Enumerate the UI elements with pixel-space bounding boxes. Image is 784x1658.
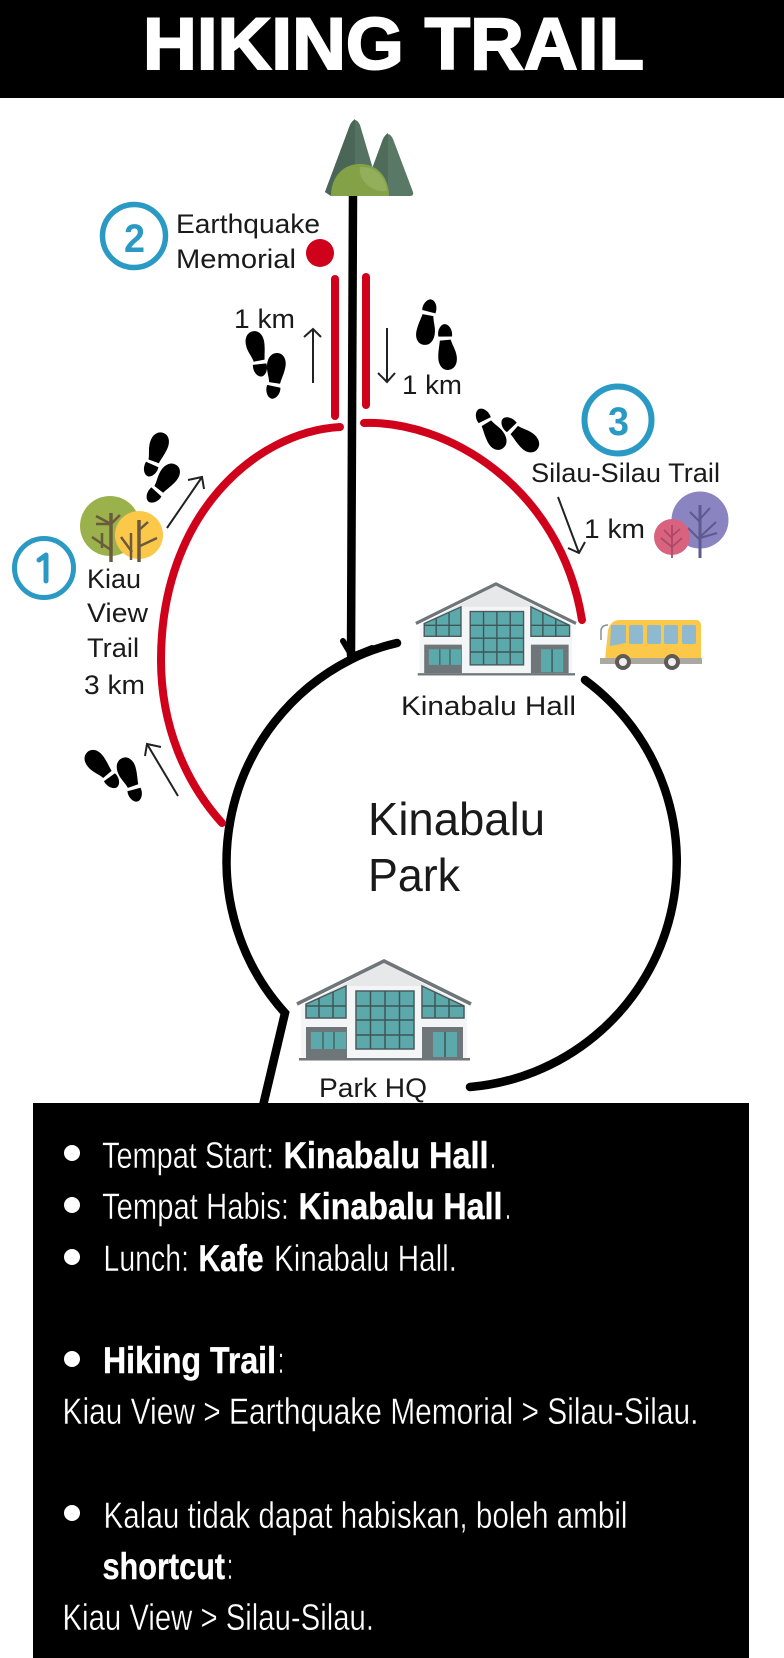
bullet: hiking trail route: Hiking Trail — [103, 1340, 276, 1381]
label: 1 km Silau-Silau: 1 km — [584, 514, 645, 544]
bullet list: start, finish, lunch: Kinabalu Hall — [284, 1135, 488, 1176]
bullet: shortcut route — [62, 1495, 628, 1638]
icon: mountain summit — [325, 119, 413, 196]
label: 1 km down: 1 km — [402, 370, 462, 400]
label: Kiau View Trail 3 km: 3 km — [84, 670, 145, 700]
red trail: Kiau View — [161, 427, 340, 823]
badge 2 — [102, 204, 166, 268]
arrow: Kiau View upper — [167, 477, 204, 528]
label: Park HQ: Park HQ — [319, 1073, 427, 1103]
bullet list: start, finish, lunch: Kinabalu Hall. — [274, 1238, 457, 1279]
title: HIKING TRAIL — [143, 4, 644, 85]
icon: green and yellow trees — [80, 496, 163, 562]
bullet list: start, finish, lunch: Tempat Habis: — [102, 1186, 289, 1227]
arrow: down — [378, 328, 395, 382]
footprints: left of spur — [244, 330, 287, 400]
header banner — [0, 0, 784, 98]
label: Kiau View Trail 3 km: Trail — [87, 633, 139, 663]
bullet: shortcut route: Kiau View > Silau-Silau. — [62, 1597, 374, 1638]
marker: Earthquake Memorial — [306, 239, 334, 267]
label: Kinabalu Hall: Kinabalu Hall — [401, 691, 576, 721]
label: Earthquake Memorial — [176, 209, 320, 274]
bullet: shortcut route: Kalau tidak dapat habiskan, boleh ambil — [104, 1495, 628, 1536]
panel: notes — [33, 1103, 749, 1658]
footprints: right of spur — [414, 298, 458, 371]
bullet list: start, finish, lunch: . — [505, 1186, 511, 1227]
arrow: Silau-Silau down — [558, 497, 585, 553]
label: Kinabalu Park: Park — [368, 849, 461, 901]
bullet: shortcut route: : — [227, 1546, 233, 1587]
footprints: lower Kiau View — [80, 746, 146, 804]
label: Silau-Silau Trail: Silau-Silau Trail — [531, 458, 720, 488]
bullet list: start, finish, lunch: Kinabalu Hall — [298, 1186, 502, 1227]
icon: Park HQ building — [297, 961, 471, 1060]
red trail: Silau-Silau — [364, 423, 582, 620]
icon: bus — [600, 620, 702, 670]
bullet: hiking trail route: : — [278, 1340, 284, 1381]
arrow: up — [304, 329, 321, 383]
footprints: upper Kiau View — [139, 430, 184, 507]
label: Kinabalu Park — [368, 793, 545, 901]
badge 1 — [14, 538, 74, 598]
label: Kiau View Trail 3 km: Kiau — [87, 564, 141, 594]
arrow: Kiau View lower — [145, 744, 178, 796]
bullet: shortcut route: shortcut — [102, 1546, 225, 1587]
badge 3 — [584, 386, 652, 454]
black road loop: Kinabalu Park circuit — [227, 643, 677, 1110]
badge 2: 2 — [124, 217, 145, 261]
bullet list: start, finish, lunch: Kafe — [198, 1238, 264, 1279]
bullet list: start, finish, lunch: . — [490, 1135, 496, 1176]
bullet list: start, finish, lunch: Lunch: — [104, 1238, 189, 1279]
label: 1 km up: 1 km — [234, 304, 295, 334]
footprints: Silau-Silau — [471, 404, 543, 456]
label: Kinabalu Park: Kinabalu — [368, 793, 545, 845]
icon: Kinabalu Hall building — [416, 584, 576, 675]
label: Kiau View Trail 3 km: View — [87, 598, 149, 628]
icon: purple and pink trees — [654, 492, 728, 558]
label: Kiau View Trail 3 km — [84, 564, 149, 700]
label: Earthquake Memorial: Memorial — [176, 244, 296, 274]
bullet list: start, finish, lunch — [64, 1135, 511, 1279]
red trail: Earthquake Memorial spurs — [335, 277, 366, 416]
badge 3: 3 — [608, 400, 629, 444]
bullet: hiking trail route — [62, 1340, 698, 1432]
bullet list: start, finish, lunch: Tempat Start: — [102, 1135, 274, 1176]
black road to summit — [343, 195, 372, 656]
label: Earthquake Memorial: Earthquake — [176, 209, 320, 239]
